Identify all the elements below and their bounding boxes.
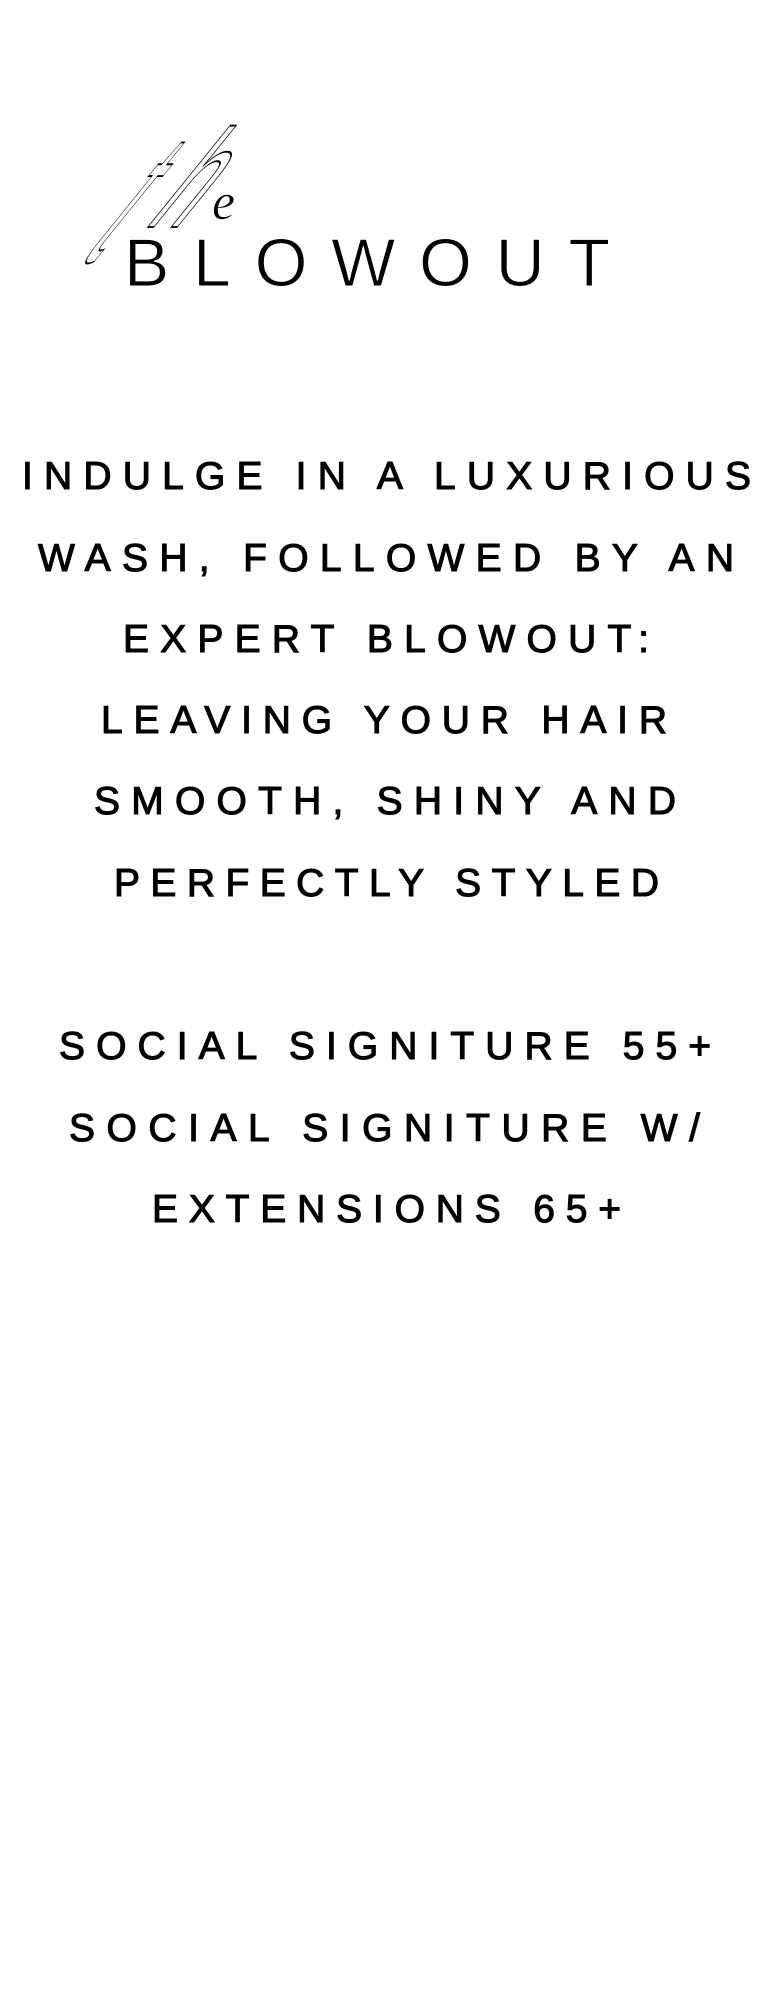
text block: pricing: SOCIAL SIGNITURE W/ [69,1107,700,1150]
title [46,95,610,301]
text block: description: WASH, FOLLOWED BY AN [38,537,734,580]
text block: pricing: EXTENSIONS 65+ [152,1188,621,1231]
text block: description: SMOOTH, SHINY AND [94,780,676,823]
text block: description: LEAVING YOUR HAIR [101,699,667,742]
text block: description: PERFECTLY STYLED [114,862,659,905]
text block: description [22,455,751,905]
script word: the: e [212,174,235,231]
text block: description: EXPERT BLOWOUT: [123,618,649,661]
text block: pricing [59,1025,711,1231]
script word: the: h [119,100,285,257]
script word: the: t [46,95,230,301]
heading: BLOWOUT: BLOWOUT [124,225,610,301]
text block: pricing: SOCIAL SIGNITURE 55+ [59,1025,711,1068]
text block: description: INDULGE IN A LUXURIOUS [22,455,751,498]
